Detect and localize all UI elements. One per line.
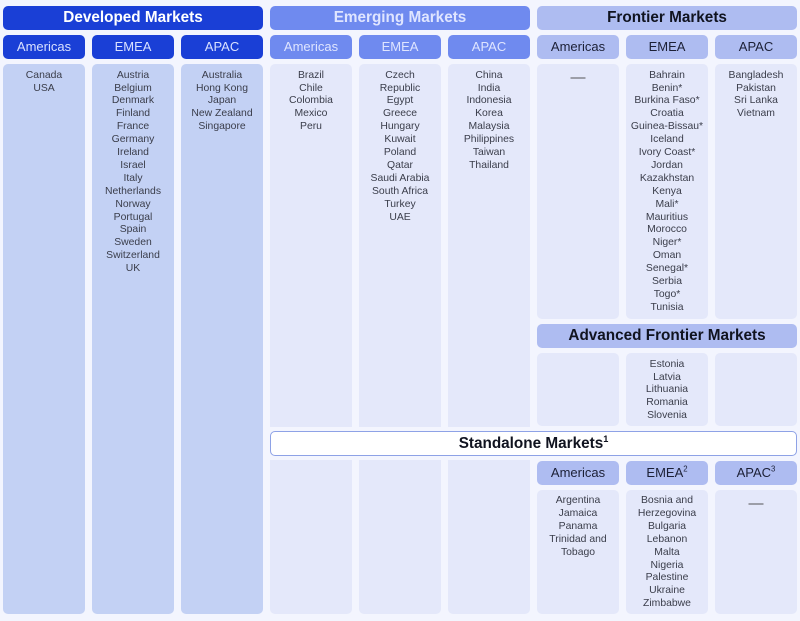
list: developed EMEA: Belgium	[114, 82, 152, 94]
list: developed EMEA: Sweden	[114, 237, 152, 248]
cell: advanced frontier APAC	[715, 353, 797, 426]
list: developed EMEA: Ireland	[117, 147, 149, 158]
heading: frontier APAC: APAC	[739, 39, 773, 54]
heading: developed APAC	[181, 35, 263, 59]
list: developed EMEA: Germany	[112, 134, 154, 145]
list: developed americas	[3, 64, 85, 614]
heading: developed markets: Developed Markets	[63, 9, 203, 26]
list: developed APAC	[181, 64, 263, 614]
list: emerging APAC: India	[478, 82, 500, 94]
list: frontier EMEA: Serbia	[652, 276, 682, 287]
list: frontier EMEA: Ivory Coast*	[639, 147, 695, 158]
list: standalone APAC: —	[748, 495, 764, 512]
list: standalone EMEA: Zimbabwe	[643, 598, 691, 609]
list: developed EMEA: Israel	[120, 160, 146, 171]
list: developed americas: Canada	[26, 70, 62, 81]
list: frontier americas	[537, 64, 619, 319]
list: standalone EMEA: Bulgaria	[648, 521, 686, 532]
list: advanced frontier EMEA: Latvia	[653, 372, 681, 382]
heading: developed americas: Americas	[17, 39, 71, 54]
list: frontier EMEA	[626, 64, 708, 319]
heading: emerging APAC: APAC	[472, 39, 506, 54]
list: emerging APAC: Korea	[475, 108, 503, 119]
list: standalone americas: Argentina	[556, 495, 600, 506]
list: frontier americas: —	[570, 69, 586, 86]
heading: standalone markets: Standalone Markets1	[459, 434, 608, 452]
list: frontier EMEA: Burkina Faso*	[634, 95, 700, 106]
panel: advanced frontier markets	[537, 324, 797, 426]
list: frontier APAC	[715, 64, 797, 319]
heading: frontier EMEA	[626, 35, 708, 59]
list: frontier EMEA: Morocco	[647, 224, 687, 235]
list: emerging EMEA: South Africa	[372, 186, 428, 197]
list: frontier APAC: Sri Lanka	[734, 95, 778, 106]
list: standalone EMEA: Ukraine	[649, 585, 685, 596]
list: emerging EMEA: Kuwait	[384, 134, 416, 145]
list: frontier EMEA: Oman	[653, 250, 681, 261]
heading: emerging americas: Americas	[284, 39, 338, 54]
list: frontier EMEA: Kenya	[652, 186, 682, 197]
list: developed EMEA: Denmark	[112, 95, 154, 106]
heading: standalone americas: Americas	[551, 465, 605, 480]
list: developed EMEA: Portugal	[114, 212, 152, 223]
list: frontier APAC: Bangladesh	[729, 70, 783, 81]
list: emerging EMEA: Czech	[385, 70, 415, 81]
list: emerging APAC: Indonesia	[466, 95, 512, 106]
panel: frontier markets	[537, 6, 797, 319]
heading: frontier markets	[537, 6, 797, 30]
list: frontier EMEA: Kazakhstan	[640, 173, 694, 184]
heading: frontier americas: Americas	[551, 39, 605, 54]
list: frontier EMEA: Niger*	[653, 237, 681, 248]
list: advanced frontier EMEA: Estonia	[650, 359, 684, 370]
heading: developed EMEA: EMEA	[115, 39, 151, 54]
list: developed EMEA: UK	[126, 263, 140, 274]
list: developed EMEA	[92, 64, 174, 614]
list: frontier EMEA: Mali*	[655, 199, 679, 210]
list: frontier EMEA: Senegal*	[646, 263, 688, 274]
heading: advanced frontier markets: Advanced Frontier Markets	[568, 327, 766, 344]
list: emerging APAC: Taiwan	[473, 147, 505, 158]
panel: developed markets	[3, 6, 263, 614]
heading: advanced frontier markets	[537, 324, 797, 348]
heading: emerging americas	[270, 35, 352, 59]
list: developed EMEA: Switzerland	[106, 250, 160, 261]
heading: developed markets	[3, 6, 263, 30]
heading: developed APAC: APAC	[205, 39, 239, 54]
list: emerging APAC: Thailand	[469, 160, 509, 171]
list: frontier APAC: Vietnam	[737, 108, 775, 119]
list: standalone EMEA	[626, 490, 708, 614]
list: emerging EMEA: Greece	[383, 108, 417, 119]
list: developed americas: USA	[33, 82, 55, 94]
list: standalone americas: Trinidad and	[549, 534, 607, 545]
list: developed APAC: New Zealand	[191, 108, 253, 119]
heading: standalone APAC: APAC3	[737, 465, 775, 480]
list: developed APAC: Hong Kong	[196, 82, 248, 94]
list: emerging EMEA: Turkey	[384, 199, 416, 210]
list: frontier EMEA: Tunisia	[650, 302, 684, 313]
list: standalone EMEA: Nigeria	[651, 560, 683, 571]
heading: developed americas	[3, 35, 85, 59]
list: standalone EMEA: Bosnia and	[641, 495, 693, 506]
heading: standalone americas	[537, 461, 619, 485]
list: frontier EMEA: Jordan	[651, 160, 683, 171]
panel: standalone markets	[537, 461, 797, 614]
list: emerging EMEA: Poland	[384, 147, 416, 158]
list: standalone EMEA: Palestine	[646, 572, 688, 583]
list: emerging APAC: Malaysia	[468, 121, 510, 132]
list: frontier EMEA: Togo*	[654, 289, 680, 300]
heading: developed EMEA	[92, 35, 174, 59]
list: emerging americas: Peru	[300, 121, 322, 132]
list: developed EMEA: Spain	[120, 224, 146, 235]
list: frontier APAC: Pakistan	[736, 82, 776, 94]
list: frontier EMEA: Iceland	[650, 134, 684, 145]
list: emerging EMEA: Saudi Arabia	[371, 173, 429, 184]
list: emerging APAC: Philippines	[464, 134, 514, 145]
list: emerging EMEA	[359, 64, 441, 614]
list: developed EMEA: Norway	[115, 199, 151, 210]
list: standalone americas: Panama	[559, 521, 597, 532]
heading: emerging EMEA: EMEA	[382, 39, 418, 54]
list: advanced frontier EMEA: Romania	[646, 397, 688, 408]
heading: frontier APAC	[715, 35, 797, 59]
list: emerging EMEA: Egypt	[387, 95, 413, 106]
list: emerging APAC	[448, 64, 530, 614]
heading: emerging APAC	[448, 35, 530, 59]
list: emerging americas: Chile	[299, 82, 323, 94]
list: developed EMEA: Austria	[117, 70, 149, 81]
list: standalone APAC	[715, 490, 797, 614]
list: standalone EMEA: Herzegovina	[638, 508, 696, 519]
list: emerging EMEA: UAE	[389, 212, 411, 223]
heading: emerging markets: Emerging Markets	[334, 9, 466, 26]
list: emerging americas: Brazil	[298, 70, 324, 81]
list: frontier EMEA: Guinea-Bissau*	[631, 121, 703, 132]
heading: standalone EMEA	[626, 461, 708, 485]
heading: standalone markets	[270, 431, 797, 456]
list: developed APAC: Australia	[202, 70, 242, 81]
list: advanced frontier EMEA: Slovenia	[647, 410, 687, 421]
heading: frontier americas	[537, 35, 619, 59]
list: emerging EMEA: Hungary	[380, 121, 420, 132]
list: standalone EMEA: Malta	[654, 547, 680, 558]
list: developed EMEA: Finland	[116, 108, 150, 119]
band: standalone background	[266, 427, 800, 460]
list: frontier EMEA: Mauritius	[646, 212, 688, 223]
panel: emerging markets	[270, 6, 530, 614]
heading: standalone EMEA: EMEA2	[646, 465, 688, 480]
heading: frontier markets: Frontier Markets	[607, 9, 727, 26]
list: frontier EMEA: Croatia	[650, 108, 684, 119]
list: advanced frontier EMEA: Lithuania	[646, 384, 688, 395]
list: developed EMEA: Netherlands	[105, 186, 161, 197]
list: standalone EMEA: Lebanon	[647, 534, 687, 545]
heading: emerging markets	[270, 6, 530, 30]
list: emerging americas: Colombia	[289, 95, 333, 106]
list: emerging americas	[270, 64, 352, 614]
list: frontier EMEA: Benin*	[652, 82, 682, 94]
list: standalone americas	[537, 490, 619, 614]
list: emerging APAC: China	[475, 70, 503, 81]
heading: frontier EMEA: EMEA	[649, 39, 685, 54]
list: developed APAC: Singapore	[198, 121, 246, 132]
heading: emerging EMEA	[359, 35, 441, 59]
list: frontier EMEA: Bahrain	[649, 70, 685, 81]
list: standalone americas: Tobago	[561, 547, 595, 558]
heading: standalone APAC	[715, 461, 797, 485]
cell: advanced frontier americas	[537, 353, 619, 426]
list: developed EMEA: France	[117, 121, 149, 132]
list: developed EMEA: Italy	[123, 173, 143, 184]
list: emerging EMEA: Republic	[380, 82, 420, 94]
list: developed APAC: Japan	[208, 95, 236, 106]
list: standalone americas: Jamaica	[559, 508, 597, 519]
list: emerging EMEA: Qatar	[387, 160, 413, 171]
list: emerging americas: Mexico	[295, 108, 327, 119]
list: advanced frontier EMEA	[626, 353, 708, 426]
